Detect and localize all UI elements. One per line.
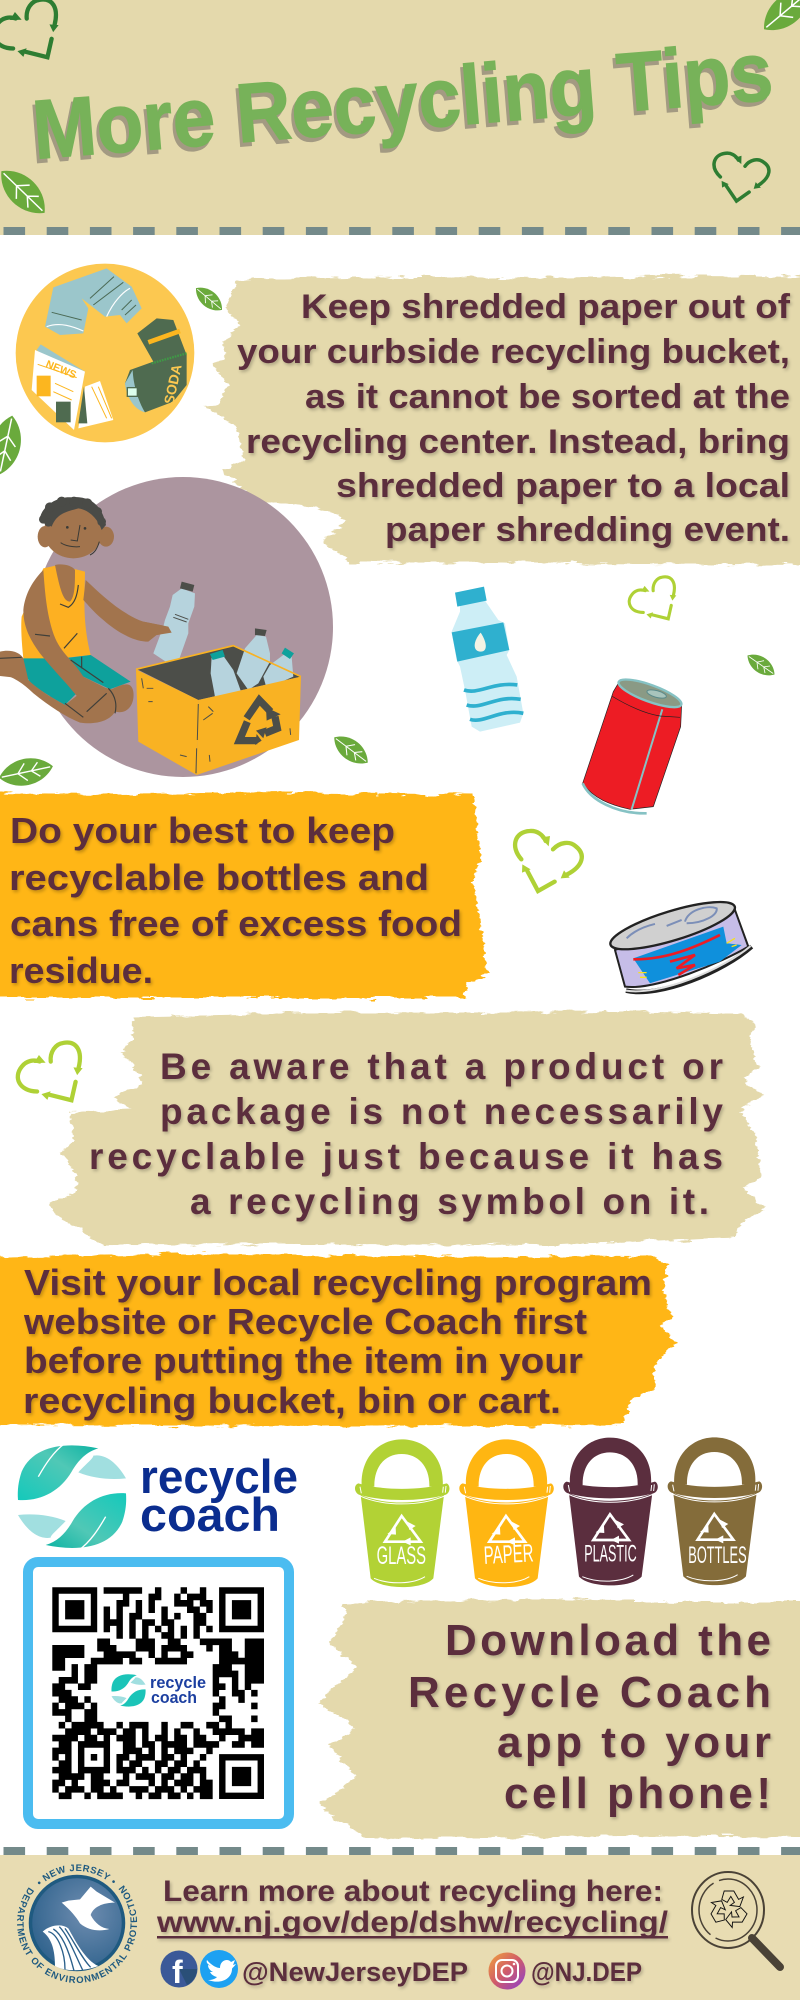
text: download the app: app to your [497, 1718, 771, 1767]
text: recycling symbol tip [89, 1046, 723, 1222]
shorts [23, 655, 131, 705]
logo: recycle coach: recycle [140, 1450, 298, 1503]
text: local program tip [23, 1262, 652, 1421]
plastic bottle [45, 268, 142, 335]
panel: bottles and cans tip [0, 793, 488, 998]
text: shredded paper tip: recycling center. Instead, bring [246, 423, 790, 461]
text: shredded paper tip: as it cannot be sorted at the [305, 378, 790, 416]
footer text [156, 1875, 669, 1987]
logo: NJ DEP seal: • NEW JERSEY • [38, 1864, 115, 1884]
text: shredded paper tip [237, 288, 791, 549]
text: bottles and cans tip [9, 810, 462, 991]
logo: recycle coach [18, 1443, 298, 1550]
footer text: Learn more about recycling here: [163, 1875, 663, 1908]
icon: instagram [488, 1952, 526, 1990]
footer text: @NewJerseyDEP [242, 1957, 468, 1987]
pointing arm [83, 580, 172, 642]
icon: facebook: f [172, 1954, 183, 1990]
text: bottles and cans tip: residue. [9, 950, 153, 991]
hand finger [143, 622, 172, 635]
held bottle [153, 582, 195, 663]
icon: large lime heart [515, 831, 582, 891]
newspaper [32, 344, 113, 430]
newspaper: NEWS [44, 358, 78, 381]
tank top [21, 565, 91, 660]
bucket: plastic [563, 1438, 658, 1585]
icon: lime heart left [12, 1028, 100, 1117]
clothing creases [0, 585, 116, 717]
near arm [23, 570, 107, 702]
icon: leaf top right [755, 0, 800, 40]
text: bottles and cans tip: recyclable bottles and [9, 857, 429, 898]
bucket: paper: PAPER [483, 1539, 534, 1570]
text: local program tip: Visit your local recycling program [24, 1262, 652, 1303]
text: local program tip: website or Recycle Coach first [23, 1301, 587, 1342]
recycling buckets [355, 1437, 762, 1587]
person and box [0, 497, 301, 775]
logo: NJ DEP seal: DEPARTMENT OF ENVIRONMENTAL PROTECTION [17, 1885, 138, 1984]
text: shredded paper tip: paper shredding event. [385, 511, 790, 549]
icon: leaf right [743, 649, 779, 681]
footer band [0, 1851, 800, 2000]
icon: leaf left edge [0, 413, 26, 477]
icon: small leaf by panel [191, 282, 227, 316]
bucket: glass: GLASS [377, 1542, 426, 1570]
water bottle [452, 587, 523, 732]
bucket: bottles: BOTTLES [688, 1542, 747, 1569]
logo: recycle coach: coach [140, 1488, 280, 1541]
bucket: plastic: PLASTIC [584, 1541, 637, 1568]
panel: download the app [319, 1599, 800, 1838]
legs [0, 667, 134, 723]
text: download the app: Download the [445, 1616, 771, 1665]
illustration: person recycling bottles [0, 477, 333, 777]
icon: twitter [200, 1950, 238, 1988]
bucket: bottles [668, 1437, 762, 1585]
bottles in box [210, 628, 294, 697]
footer text: www.nj.gov/dep/dshw/recycling/ [156, 1906, 669, 1939]
box inner [137, 646, 301, 700]
icon: leaf bottom left of illustration [0, 753, 56, 791]
soda can: SODA [161, 363, 185, 406]
icon: leaf near circle [328, 729, 374, 771]
footer text: @NJ.DEP [531, 1957, 642, 1987]
text: recycling symbol tip: recyclable just because it has [89, 1136, 723, 1177]
neck [55, 564, 75, 602]
head [38, 497, 114, 558]
panel: recycling symbol tip [51, 1012, 765, 1245]
icon: heart dark right [713, 149, 772, 203]
bucket: paper [459, 1439, 554, 1587]
QR center logo: coach [151, 1688, 197, 1707]
text: bottles and cans tip: Do your best to keep [10, 810, 395, 851]
icon: small lime heart [625, 566, 689, 631]
QR center logo: recycle [150, 1673, 206, 1692]
text: shredded paper tip: your curbside recycling bucket, [237, 333, 790, 371]
soda can [125, 318, 187, 412]
icon: leaf header left [0, 161, 55, 223]
panel: shredded paper tip [204, 276, 800, 565]
text: shredded paper tip: Keep shredded paper out of [301, 288, 791, 326]
text: download the app: cell phone! [504, 1769, 771, 1818]
illustration: recycling circle [16, 264, 194, 442]
illustrations: bottle, cans, hearts [452, 587, 752, 992]
recycle symbol on box [239, 700, 281, 745]
text: recycling symbol tip: package is not necessarily [160, 1091, 723, 1132]
text: bottles and cans tip: cans free of excess food [10, 903, 462, 944]
header band [0, 0, 800, 235]
tin can [606, 893, 752, 992]
icon: facebook [160, 1950, 198, 1990]
QR card [28, 1562, 289, 1824]
text: local program tip: before putting the item in your [24, 1340, 583, 1381]
QR code [52, 1587, 264, 1799]
mauve circle [33, 477, 333, 777]
QR center logo [111, 1673, 206, 1707]
icon: heart dark top left [0, 0, 76, 74]
back foot [0, 651, 37, 680]
red soda can [583, 674, 684, 813]
text: download the app [408, 1616, 771, 1818]
text: local program tip: recycling bucket, bin or cart. [23, 1380, 561, 1421]
text: download the app: Recycle Coach [408, 1668, 771, 1717]
bucket: glass [355, 1439, 449, 1587]
box faces [136, 669, 198, 775]
icon: magnifying glass with recycle symbol [692, 1872, 780, 1967]
text: recycling symbol tip: Be aware that a product or [160, 1046, 723, 1087]
text: recycling symbol tip: a recycling symbol on it. [190, 1181, 709, 1222]
panel: local program tip [0, 1254, 676, 1426]
text: shredded paper tip: shredded paper to a local [336, 467, 790, 505]
